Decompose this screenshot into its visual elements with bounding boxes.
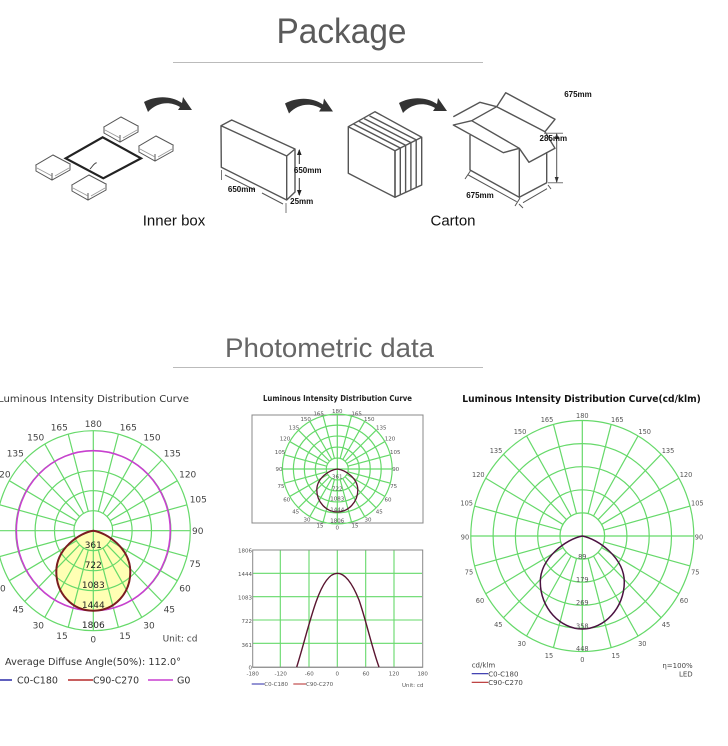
- polar labels: left: 1083: [82, 581, 105, 591]
- polar labels: left: 722: [85, 561, 102, 571]
- polar labels: middle: 135: [376, 426, 387, 432]
- legend: left polar: C90-C270: [93, 676, 139, 686]
- polar labels: left: 180: [85, 420, 102, 430]
- chart frame: middle polar: [252, 415, 423, 523]
- axis labels: 361: [242, 643, 252, 649]
- icon: open carton with dimensions: 675mm: [564, 90, 592, 99]
- intensity curve: [297, 573, 379, 667]
- note: efficiency: η=100%: [662, 662, 693, 670]
- polar labels: right: 358: [576, 622, 589, 630]
- polar labels: right: 179: [576, 576, 589, 584]
- axis labels: 0: [336, 671, 340, 677]
- axis labels: [238, 549, 428, 677]
- polar labels: right: 75: [691, 568, 699, 576]
- polar labels: left: 165: [120, 424, 137, 434]
- polar labels: right: 135: [490, 447, 502, 455]
- polar labels: right: 150: [638, 428, 651, 436]
- polar labels: left: 150: [143, 434, 161, 444]
- polar labels: left: 30: [33, 622, 44, 632]
- axis labels: 0: [248, 665, 252, 671]
- polar labels: middle: 361: [332, 475, 343, 481]
- polar labels: middle: 75: [278, 484, 285, 490]
- polar labels: right: 269: [576, 599, 589, 607]
- axis labels: 1444: [238, 572, 252, 578]
- polar labels: middle: 30: [364, 518, 372, 524]
- polar labels: left: 1444: [82, 601, 105, 611]
- polar labels: middle: 1806: [330, 518, 345, 524]
- chart title: middle polar: Luminous Intensity Distribution Curve: [263, 394, 412, 403]
- polar labels: left: 0: [90, 636, 96, 646]
- polar labels: middle: 45: [376, 509, 383, 515]
- polar labels: middle: 60: [283, 498, 291, 504]
- polar labels: right: 150: [514, 428, 526, 436]
- polar labels: middle: 15: [316, 524, 324, 530]
- chart title: left polar: Luminous Intensity Distribution Curve: [0, 394, 189, 405]
- axis labels: -60: [305, 671, 314, 677]
- chart: polar distribution curve, middle: [252, 394, 423, 531]
- legend: left polar: [0, 676, 190, 686]
- legend: left polar: C0-C180: [17, 676, 58, 686]
- polar labels: middle: 150: [364, 417, 375, 423]
- polar labels: middle: 135: [289, 426, 300, 432]
- polar labels: right: 45: [662, 621, 670, 629]
- axis labels: 1083: [238, 596, 252, 602]
- legend: right polar: [472, 662, 523, 687]
- arrow: inner box to stack: [285, 98, 333, 114]
- axis labels: 180: [417, 671, 428, 677]
- polar labels: middle: 75: [390, 484, 398, 490]
- chart: polar distribution curve, right: [460, 394, 704, 687]
- polar grid and curves: left: [0, 431, 190, 631]
- polar labels: right: 90: [461, 534, 469, 542]
- polar labels: left: 45: [13, 606, 24, 616]
- polar labels: right: 60: [680, 597, 688, 605]
- polar labels: middle: 120: [385, 437, 396, 443]
- polar labels: right: 90: [695, 534, 703, 542]
- axis labels: 1806: [238, 549, 252, 555]
- axis labels: -180: [246, 671, 259, 677]
- legend and unit: [252, 682, 423, 689]
- icon: inner box with dimensions: 650mm: [294, 166, 321, 175]
- icon: open carton with dimensions: [453, 90, 592, 208]
- icon: inner box with dimensions: 650mm: [228, 185, 255, 194]
- axis labels: -120: [274, 671, 287, 677]
- polar labels: middle: 30: [304, 518, 311, 524]
- legend: right polar: C90-C270: [488, 679, 523, 687]
- polar labels: middle: 90: [392, 467, 400, 473]
- polar labels: right: [460, 412, 704, 664]
- polar labels: right: 89: [578, 553, 586, 561]
- note: efficiency: [662, 662, 693, 678]
- polar labels: left: Unit: cd: [163, 634, 197, 644]
- icon: inner box with dimensions: 25mm: [290, 197, 313, 206]
- polar labels: middle: 60: [384, 498, 392, 504]
- polar labels: left: 60: [179, 584, 191, 594]
- polar labels: left: 15: [119, 632, 131, 642]
- axis labels: 60: [362, 671, 370, 677]
- legend: right polar: cd/klm: [472, 662, 495, 670]
- polar grid and curve: right: [471, 420, 694, 652]
- note: efficiency: LED: [679, 670, 693, 678]
- polar labels: right: 165: [541, 416, 553, 424]
- polar labels: middle: 105: [275, 450, 286, 456]
- polar labels: left: 120: [179, 470, 197, 480]
- polar labels: right: 135: [662, 447, 674, 455]
- chart: polar distribution curve, left: [0, 394, 207, 686]
- polar labels: right: 30: [518, 640, 526, 648]
- heading: Package: Package: [276, 12, 406, 51]
- polar labels: middle: [275, 409, 401, 531]
- polar labels: middle: 165: [351, 411, 362, 417]
- polar grid and curve: middle: [282, 414, 392, 524]
- label: Carton: Carton: [430, 213, 476, 230]
- polar labels: right: 0: [580, 656, 584, 664]
- heading: Photometric data: Photometric data: [225, 333, 435, 363]
- axis labels: 722: [242, 619, 252, 625]
- chart: cartesian intensity curve: [238, 549, 428, 689]
- polar labels: right: 120: [472, 471, 485, 479]
- polar labels: middle: 1083: [330, 497, 345, 503]
- axis labels: 120: [389, 671, 400, 677]
- polar labels: middle: 165: [313, 411, 324, 417]
- polar labels: left: 361: [85, 541, 102, 551]
- polar labels: left: 30: [143, 622, 155, 632]
- polar labels: right: 45: [494, 621, 502, 629]
- polar labels: left: 150: [27, 434, 45, 444]
- polar labels: middle: 180: [332, 409, 343, 415]
- polar labels: right: 75: [465, 568, 473, 576]
- chart title: right polar: Luminous Intensity Distribution Curve(cd/klm): [462, 394, 701, 405]
- legend and unit: Unit: cd: [402, 683, 423, 689]
- polar labels: left: 90: [192, 527, 204, 537]
- legend and unit: C90-C270: [306, 682, 334, 688]
- polar labels: right: 105: [691, 500, 704, 508]
- polar labels: left: 105: [190, 496, 207, 506]
- polar labels: right: 60: [476, 597, 484, 605]
- legend: right polar: C0-C180: [488, 670, 518, 678]
- polar labels: right: 105: [460, 500, 473, 508]
- polar labels: right: 448: [576, 645, 589, 653]
- icon: inner box with dimensions: [221, 120, 321, 213]
- polar labels: left: 135: [164, 450, 181, 460]
- polar labels: left: [0, 420, 207, 646]
- polar labels: right: 120: [680, 471, 692, 479]
- polar labels: left: 15: [56, 632, 68, 642]
- polar labels: middle: 0: [336, 525, 340, 531]
- polar labels: middle: 722: [332, 486, 343, 492]
- arrow: stack to carton: [399, 98, 447, 113]
- icon: stacked inner boxes: [348, 112, 422, 197]
- polar labels: middle: 15: [352, 524, 359, 530]
- polar labels: middle: 150: [300, 417, 311, 423]
- icon: open carton with dimensions: 285mm: [540, 134, 567, 143]
- polar labels: right: 30: [638, 640, 646, 648]
- polar labels: middle: 105: [390, 450, 401, 456]
- polar labels: right: 15: [612, 652, 620, 660]
- icon: open carton with dimensions: 675mm: [466, 191, 494, 200]
- polar labels: right: 180: [576, 412, 589, 420]
- polar labels: middle: 90: [276, 467, 283, 473]
- polar labels: middle: 120: [280, 437, 291, 443]
- legend and unit: C0-C180: [264, 682, 288, 688]
- polar labels: left: 165: [51, 424, 68, 434]
- legend: left polar: G0: [177, 676, 190, 686]
- plot frame and grid: [253, 550, 423, 667]
- label: Inner box: Inner box: [143, 213, 206, 230]
- polar labels: right: 165: [611, 416, 624, 424]
- polar labels: left: 45: [164, 606, 175, 616]
- polar labels: left: 75: [189, 560, 201, 570]
- icon: panel with four small boxes: [36, 117, 173, 200]
- polar labels: middle: 1444: [330, 508, 345, 514]
- polar labels: right: 15: [545, 652, 553, 660]
- polar labels: middle: 45: [292, 509, 300, 515]
- polar labels: left: 1806: [82, 621, 105, 631]
- polar labels: left: 135: [7, 450, 24, 460]
- caption: average diffuse angle: Average Diffuse Angle(50%): 112.0°: [5, 657, 181, 668]
- arrow: panel to inner box: [144, 97, 192, 112]
